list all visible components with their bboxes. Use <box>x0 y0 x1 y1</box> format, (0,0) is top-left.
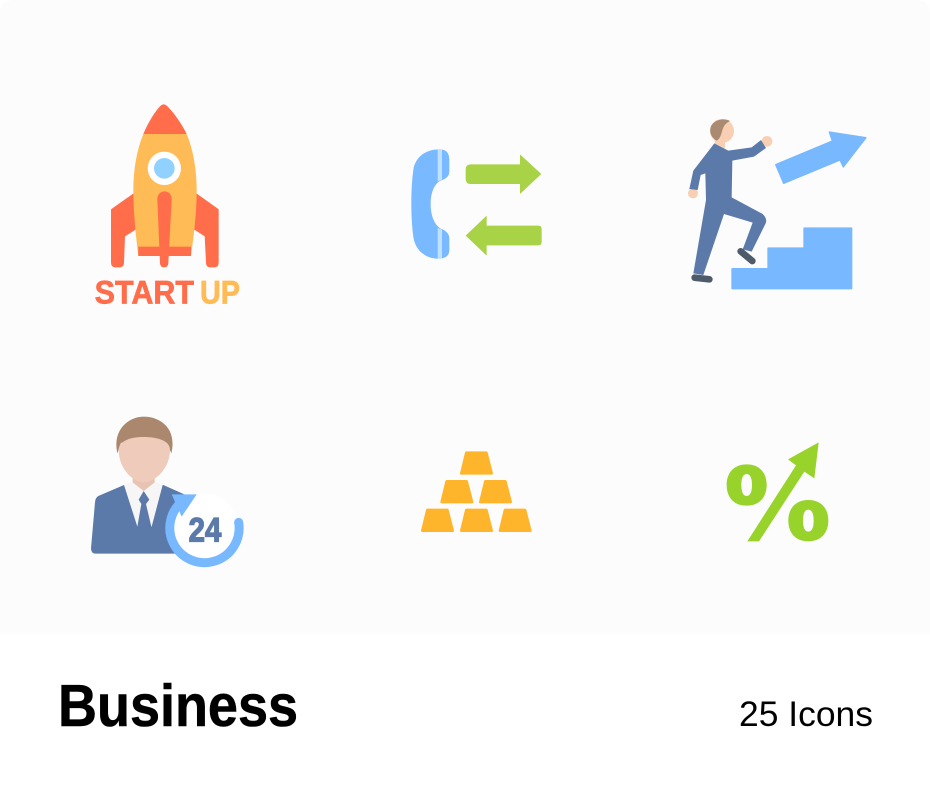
rocket body <box>133 134 197 256</box>
phone handset <box>411 149 449 259</box>
icon count: 25 Icons <box>739 695 873 734</box>
arrow: left <box>466 216 542 256</box>
percent upper zero <box>727 464 767 506</box>
hair <box>116 417 173 453</box>
rocket nose <box>143 104 187 134</box>
stairs <box>732 228 851 288</box>
icon: 24 hour support agent <box>91 417 239 563</box>
tie <box>137 491 151 533</box>
label: START UP: START <box>95 274 194 310</box>
title: Business <box>58 673 298 739</box>
icon: percent with growth arrow <box>727 442 828 541</box>
icon: startup rocket: UP <box>200 274 240 310</box>
shoes <box>695 251 752 279</box>
hands and neck <box>688 136 772 198</box>
neck <box>133 475 155 491</box>
rocket base band <box>138 247 191 256</box>
hair <box>710 119 730 141</box>
head <box>710 119 734 143</box>
arrow: upward <box>776 132 866 183</box>
icon: phone with exchange arrows <box>411 149 542 259</box>
arrow: right <box>466 154 541 194</box>
suit <box>91 485 193 554</box>
rocket fins <box>112 195 217 266</box>
handset highlights <box>438 149 442 259</box>
clock disc <box>169 494 239 563</box>
circular arrow <box>170 500 239 563</box>
icon: man climbing stairs <box>688 119 866 288</box>
suit <box>689 140 766 275</box>
icon: startup rocket <box>95 104 240 310</box>
rocket centre fin <box>157 191 172 267</box>
arrow: growth <box>747 442 819 541</box>
percent lower zero <box>788 500 828 541</box>
label: 24: 24 <box>189 512 221 550</box>
face <box>119 437 170 482</box>
icon: gold bars <box>422 453 530 531</box>
rocket window <box>148 152 181 185</box>
shirt collar <box>124 482 163 527</box>
